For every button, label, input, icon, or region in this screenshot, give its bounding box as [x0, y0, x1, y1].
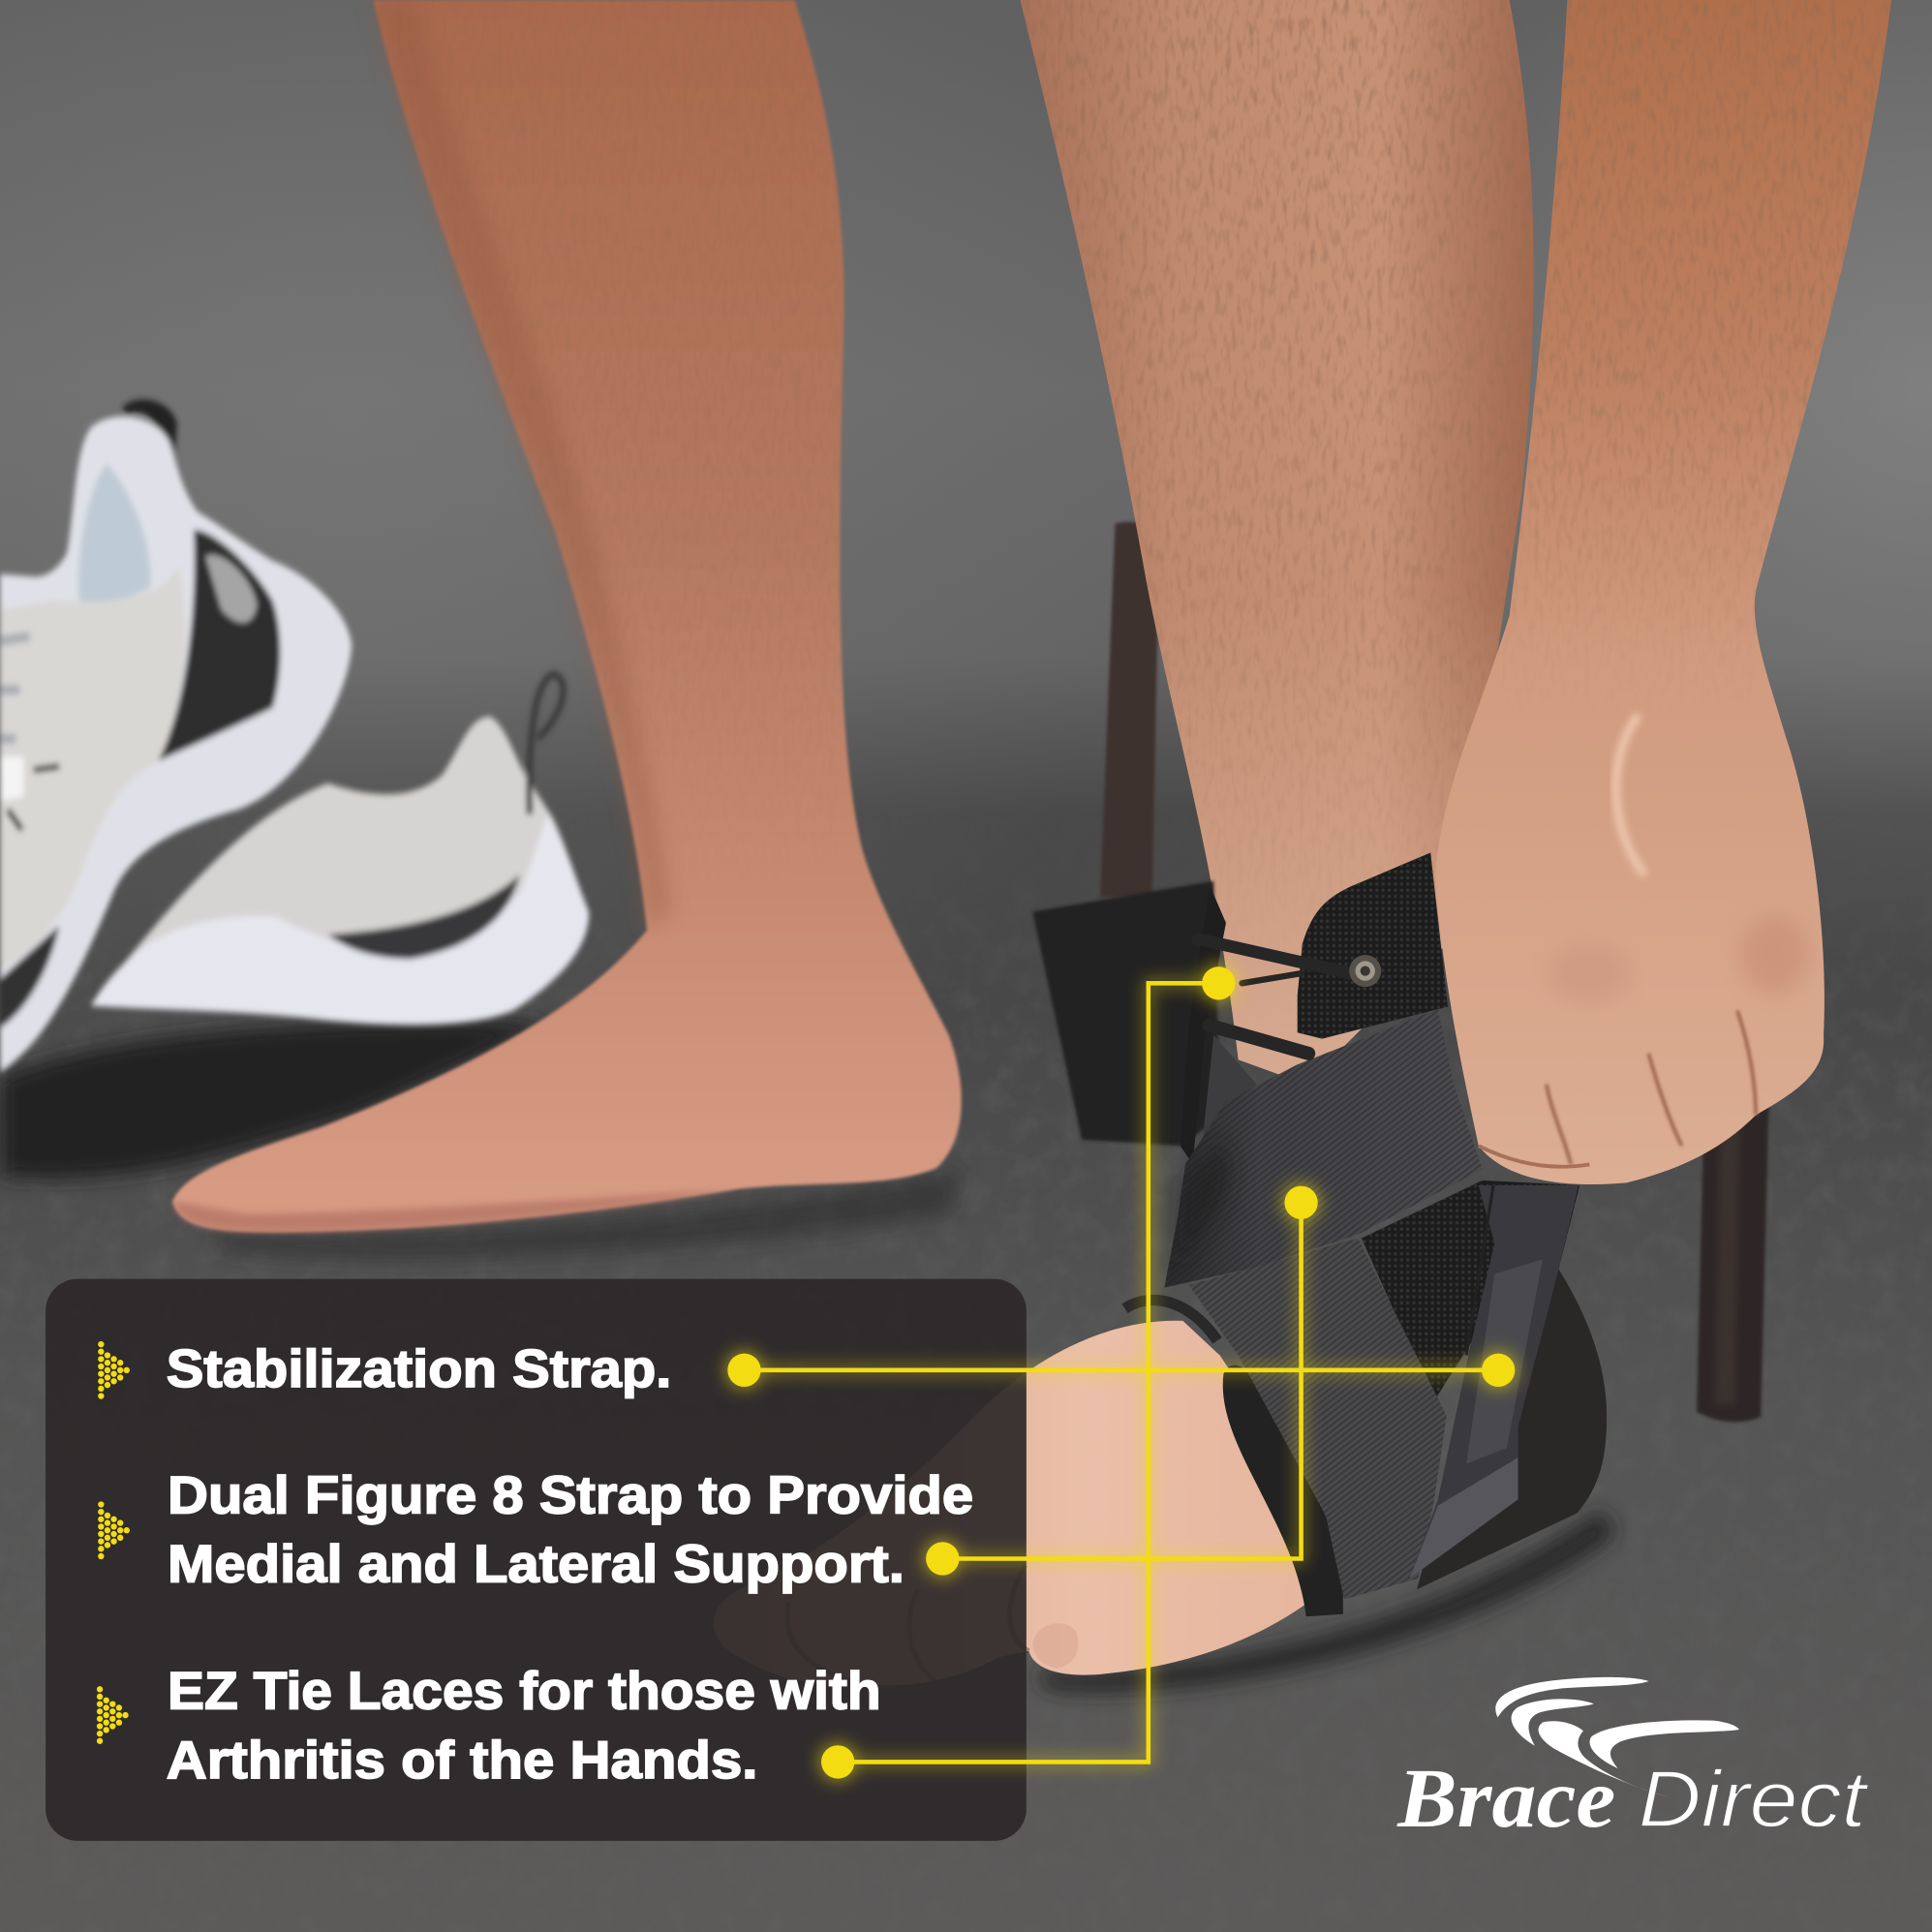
brace: main figure 8 strap	[1164, 1009, 1483, 1288]
callout: dual figure 8 strap leader	[926, 1186, 1318, 1576]
brace: forefoot band	[1125, 1301, 1217, 1340]
brace: dark mesh panel	[1362, 1181, 1579, 1401]
logo wordmark: Brace	[1396, 1751, 1615, 1845]
text: dual figure 8 strap: Medial and Lateral Support.	[168, 1534, 905, 1594]
ankle brace	[714, 852, 1607, 1685]
text: dual figure 8 strap	[168, 1464, 973, 1594]
brace: laces	[1198, 939, 1350, 1054]
callout: EZ tie laces leader	[821, 966, 1236, 1779]
brace: rear elastic flap	[1032, 881, 1220, 1146]
brace: lower figure 8 strap	[1189, 1239, 1447, 1599]
left bare leg and foot	[172, 0, 962, 1232]
logo wordmark: Direct	[1639, 1754, 1869, 1844]
bullet arrow: EZ tie laces	[97, 1686, 129, 1744]
logo: Brace Direct	[1396, 1677, 1869, 1845]
text: EZ tie laces: EZ Tie Laces for those with	[168, 1661, 881, 1721]
forefoot	[714, 1321, 1325, 1685]
text: dual figure 8 strap: Dual Figure 8 Strap to Provide	[168, 1464, 973, 1524]
front shoe	[0, 399, 352, 1072]
brace: side binding	[1181, 886, 1226, 1164]
callout: stabilization strap leader	[727, 1354, 1515, 1387]
brace: lower lace gusset	[1202, 1035, 1257, 1152]
text: EZ tie laces: Arthritis of the Hands.	[167, 1730, 757, 1790]
logo wordmark	[1396, 1751, 1869, 1845]
brace: foot edge binding	[1223, 1365, 1343, 1616]
rear shoe	[91, 674, 589, 1025]
brace: top lacing pad	[1298, 852, 1448, 1039]
bullet arrow: dual figure 8 strap	[98, 1501, 130, 1559]
floor shadows	[0, 1022, 1616, 1693]
brace: vertical stabilization strap	[1410, 1185, 1579, 1579]
text: stabilization strap: Stabilization Strap.	[167, 1338, 671, 1398]
chair legs	[1100, 522, 1769, 1422]
callout glow	[725, 965, 1517, 1781]
panel: feature list	[46, 1279, 1027, 1841]
running shoes	[0, 399, 589, 1072]
bullet arrow: stabilization strap	[98, 1341, 130, 1399]
brace: heel cup	[1417, 1269, 1607, 1589]
text: EZ tie laces	[167, 1661, 881, 1790]
right arm and hand	[1435, 0, 1897, 1184]
logo swoosh	[1495, 1677, 1739, 1798]
right leg	[1010, 0, 1540, 1085]
brace: metal eyelet	[1349, 955, 1381, 987]
